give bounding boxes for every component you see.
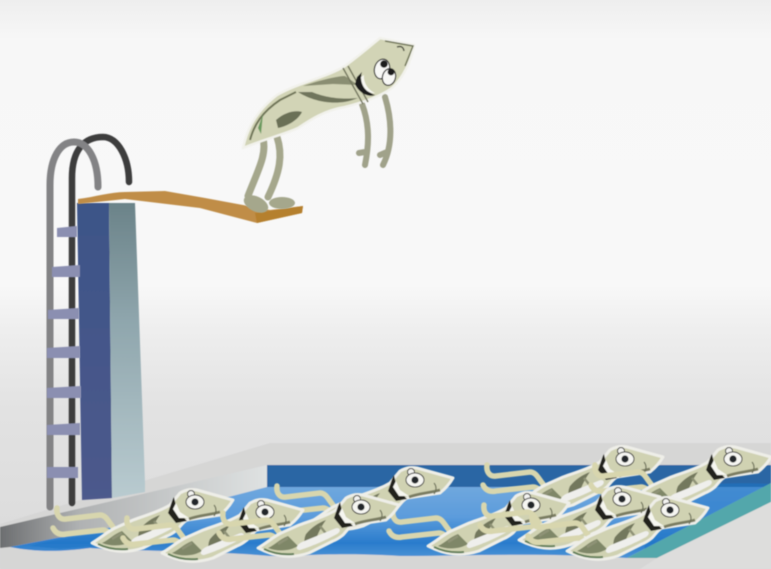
pool back wall <box>267 465 771 487</box>
pool water <box>10 483 771 558</box>
diver feet <box>241 192 295 216</box>
ladder front rail <box>50 142 98 507</box>
diving tower <box>77 203 145 500</box>
swimmer: front centre left <box>123 499 303 561</box>
swimmer: middle right <box>389 492 569 554</box>
board top <box>78 191 303 223</box>
pool deck <box>0 443 771 569</box>
swimmer: back row, far right <box>591 446 771 508</box>
tower front face <box>77 203 112 500</box>
ladder back rail <box>72 137 129 503</box>
swimmer: front centre <box>219 494 399 556</box>
swimmer: back row, centre <box>273 467 453 529</box>
swimmer: front left <box>53 489 233 551</box>
board front edge <box>255 206 303 223</box>
pool side wall <box>0 465 267 548</box>
swimming dollar bills <box>53 446 771 561</box>
pool <box>0 443 771 569</box>
tower side face <box>109 203 145 498</box>
diver bill details <box>250 41 413 140</box>
diver eyes <box>372 57 397 87</box>
pool right deck <box>640 502 771 569</box>
ladder <box>47 137 129 507</box>
diver mouth <box>355 72 375 96</box>
swimmer: back row, right <box>483 446 663 508</box>
diving board <box>78 191 303 223</box>
diver legs <box>248 137 280 197</box>
water dark patches <box>30 483 771 552</box>
ladder rungs <box>47 226 81 478</box>
pool right wall <box>627 483 771 558</box>
diver bill body <box>243 38 414 148</box>
dollar bill diver <box>241 38 414 216</box>
swimmer: front right <box>528 497 708 559</box>
swimmer: middle right, overlapping <box>480 486 660 548</box>
diver arms <box>359 97 390 165</box>
